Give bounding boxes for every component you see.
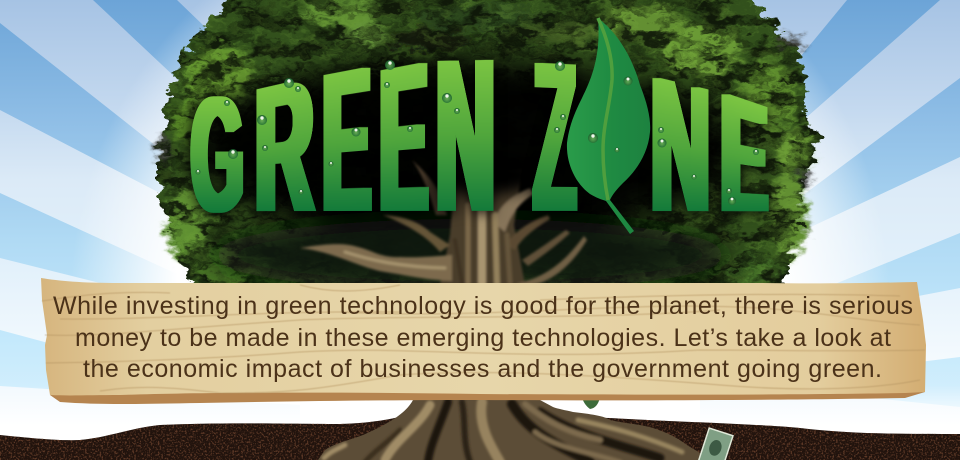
sign text: the economic impact of businesses and the government going green. xyxy=(83,355,882,383)
soil ground xyxy=(0,414,960,460)
canopy shadow xyxy=(197,60,733,291)
small leaf behind the sign xyxy=(582,398,600,409)
sign text: money to be made in these emerging technologies. Let’s take a look at xyxy=(75,324,891,352)
title: GREEN ZONE lettering: N xyxy=(436,13,495,258)
sign text: While investing in green technology is good for the planet, there is serious xyxy=(53,292,913,320)
icon: dollar bill xyxy=(698,428,733,460)
sign underside xyxy=(50,385,925,404)
dark texture xyxy=(157,0,817,295)
light texture xyxy=(157,0,817,295)
sign text xyxy=(53,292,913,383)
sign face xyxy=(41,278,926,395)
tree roots xyxy=(318,398,708,460)
title: GREEN ZONE lettering: E xyxy=(322,22,370,256)
wooden sign xyxy=(41,278,926,404)
tree trunk and branches xyxy=(300,155,587,286)
tree foliage xyxy=(157,0,817,295)
wood grain xyxy=(42,285,925,393)
title: GREEN ZONE lettering: G xyxy=(191,63,243,247)
title: GREEN ZONE lettering: E xyxy=(720,56,767,248)
title: GREEN ZONE lettering: R xyxy=(255,36,314,253)
trunk fade into canopy xyxy=(430,155,540,195)
title: GREEN ZONE lettering: N xyxy=(650,35,709,253)
title: GREEN ZONE lettering: Z xyxy=(534,17,575,257)
title: GREEN ZONE lettering: E xyxy=(379,16,427,257)
water droplets xyxy=(196,60,759,205)
icon: leaf forming the letter O xyxy=(567,18,650,234)
